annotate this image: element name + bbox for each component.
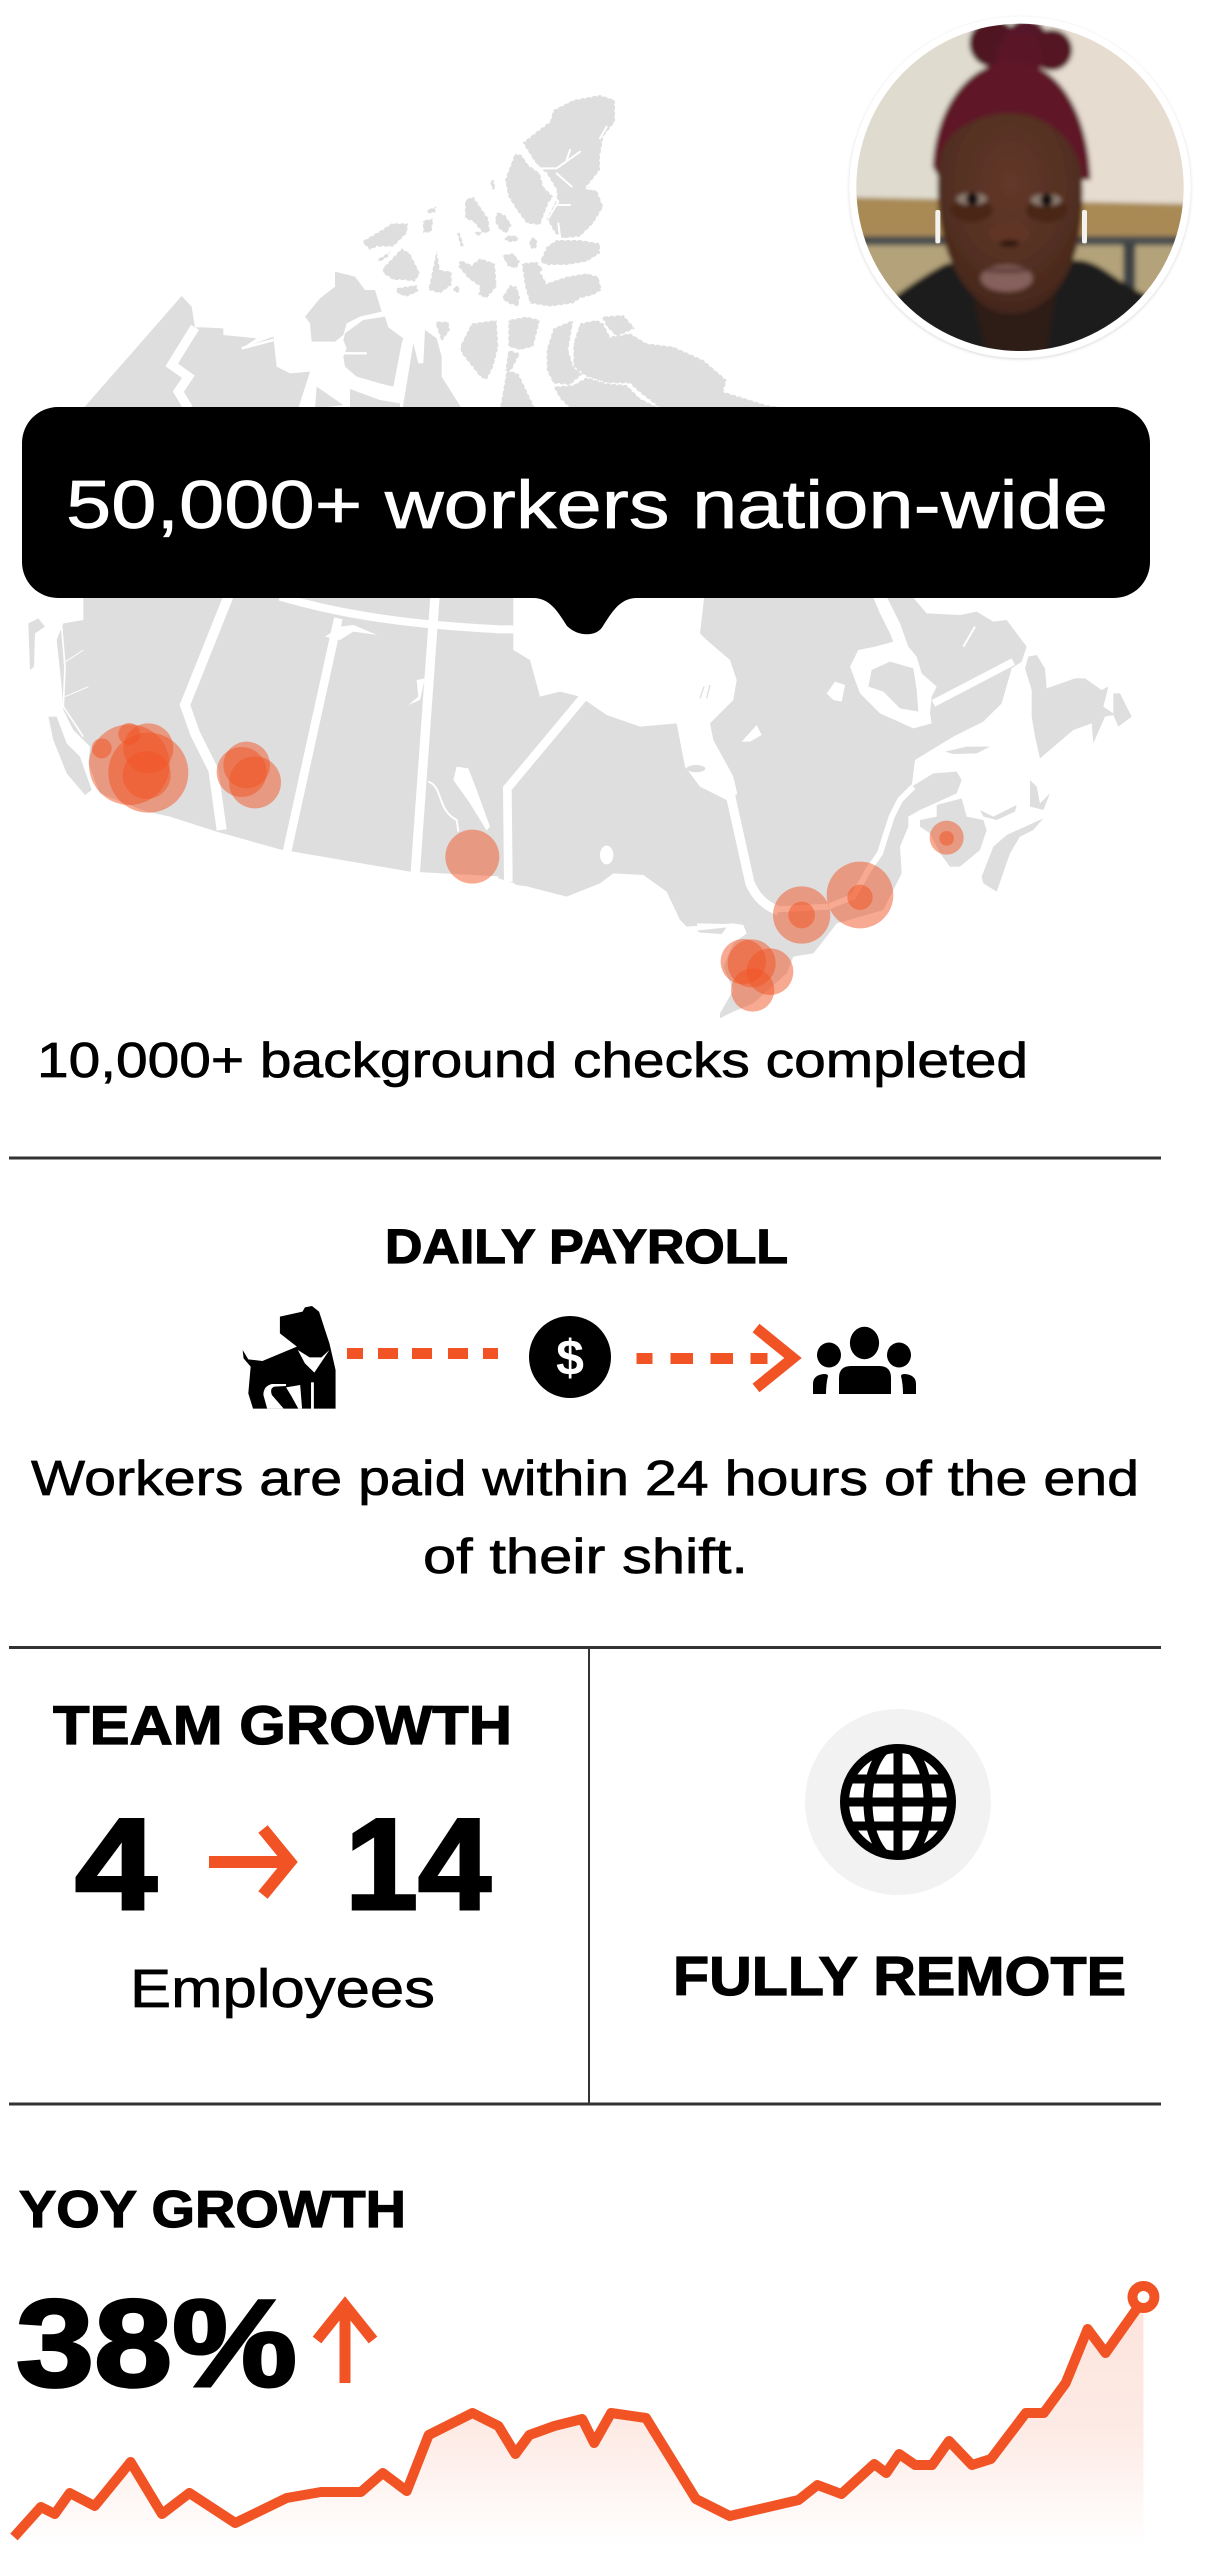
icon: dollar coin: [529, 1316, 611, 1398]
heading: yoy growth: YOY GROWTH: [19, 2181, 406, 2239]
arrow: up: [317, 2303, 373, 2383]
payroll description: Workers are paid within 24 hours of the end: [31, 1452, 1139, 1506]
label: employees: Employees: [130, 1959, 435, 2019]
callout bubble: [22, 407, 1150, 634]
line chart: [14, 2286, 1154, 2560]
line chart area: [14, 2297, 1143, 2560]
western mainland north: [83, 272, 462, 408]
heading: daily payroll: DAILY PAYROLL: [385, 1221, 788, 1274]
callout text: 50,000+ workers nation-wide: [66, 467, 1108, 543]
panel: team growth: [53, 1694, 512, 2019]
arctic channels: [527, 127, 607, 237]
background checks text: 10,000+ background checks completed: [37, 1034, 1028, 1088]
chart end marker: [1132, 2286, 1154, 2308]
payroll description: of their shift.: [423, 1530, 748, 1584]
eastern mainland: [497, 590, 1027, 1018]
icon: dollar coin: $: [556, 1330, 584, 1386]
arctic islands: [362, 95, 790, 408]
line chart stroke: [14, 2305, 1139, 2537]
panel: yoy growth: [14, 2181, 1154, 2560]
arrow: dog to dollar dashes: [347, 1348, 498, 1359]
arrow: growth: [209, 1829, 290, 1895]
number: 14: 14: [345, 1791, 491, 1937]
worker location bubbles: [89, 723, 964, 1012]
panel: fully remote: [673, 1709, 1126, 2007]
map of Canada: [28, 95, 1132, 1018]
icon: globe: [805, 1709, 991, 1895]
east cluster: [721, 821, 964, 1012]
icon: workers group: [813, 1327, 916, 1394]
western provinces: [28, 590, 543, 888]
payroll description: [31, 1452, 1139, 1584]
panel: daily payroll: [31, 1221, 1139, 1584]
number: 4: 4: [75, 1791, 157, 1937]
arrow: dollar to workers: [636, 1328, 793, 1388]
avatar photo: [849, 17, 1191, 363]
west coast cluster: [89, 723, 499, 884]
callout: workers nation-wide: [22, 407, 1150, 634]
heading: team growth: TEAM GROWTH: [53, 1694, 512, 1756]
atlantic canada: [827, 590, 1132, 892]
number: 38 percent: 38%: [16, 2275, 297, 2413]
icon: dog: [243, 1306, 336, 1409]
label: fully remote: FULLY REMOTE: [673, 1945, 1126, 2007]
hudson bay: [513, 590, 737, 800]
